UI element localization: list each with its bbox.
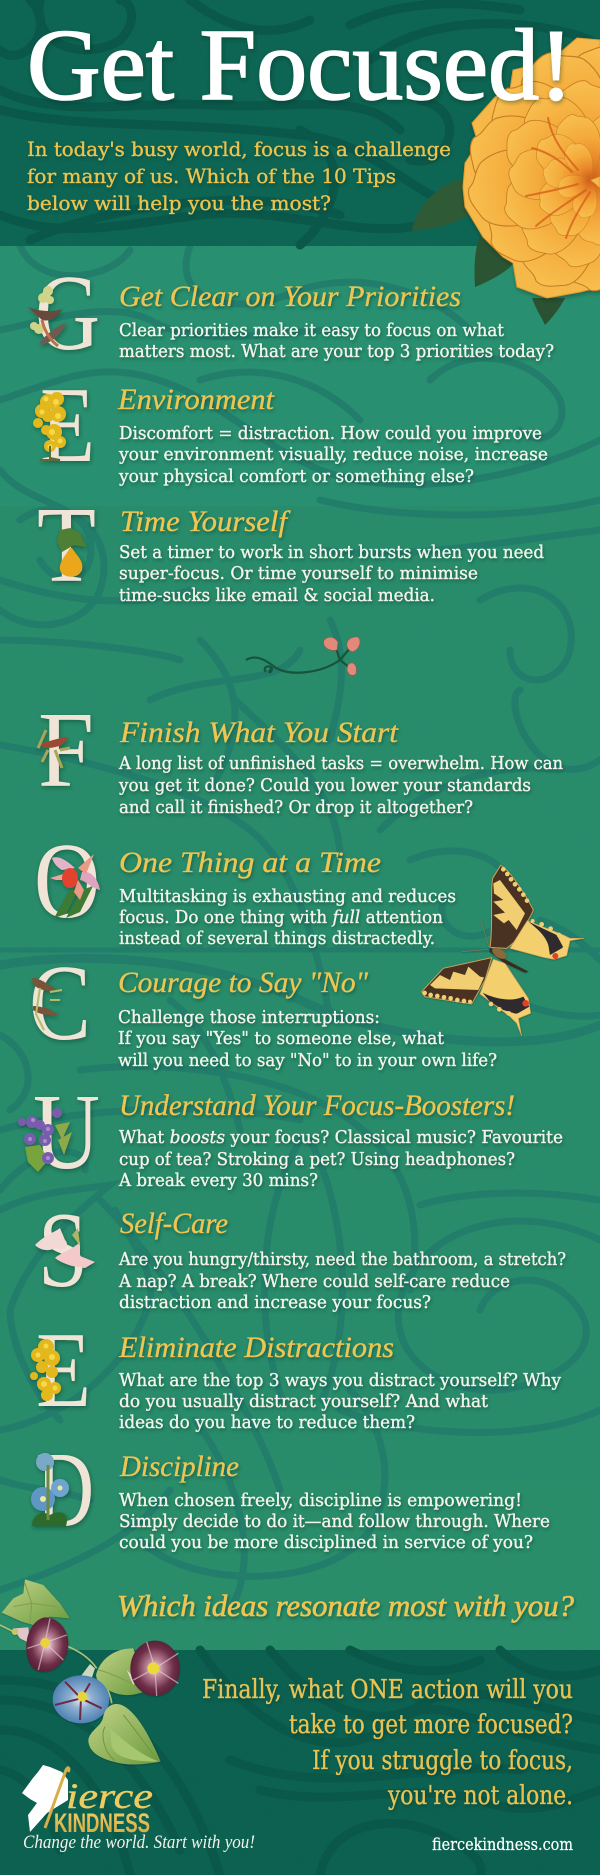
tip D: heading and text: could you be more disciplined in service of you? [119, 1532, 533, 1553]
divider: rosebud sprig [246, 637, 360, 675]
tip U: heading and text: A break every 30 mins? [118, 1170, 318, 1191]
tip C: heading and text: Challenge those interruptions: [118, 1007, 380, 1028]
tip S: heading and text: A nap? A break? Where could self-care reduce [118, 1271, 510, 1292]
illustration: morning glories and leaves [0, 1579, 180, 1764]
tip G: letter and bird illustration: G [35, 254, 100, 373]
closing text [202, 1675, 573, 1811]
tip C: heading and text: will you need to say "No" to in your own life? [118, 1050, 497, 1071]
intro text: for many of us. Which of the 10 Tips [27, 164, 396, 188]
closing text: Finally, what ONE action will you [202, 1675, 573, 1705]
tip E: heading and text [117, 383, 548, 487]
tip F: letter and bird: F [38, 691, 94, 810]
tip E: letter and yellow flowers: E [40, 366, 95, 485]
tip G: heading and text: matters most. What are your top 3 priorities today? [119, 341, 554, 362]
tip C: heading and text: Courage to Say "No" [118, 966, 368, 999]
tip E: heading and text: your environment visually, reduce noise, increase [118, 444, 548, 465]
tip O: heading and text: focus. Do one thing with full attention [119, 907, 443, 928]
logo: Fierce Kindness: ierce [66, 1776, 153, 1816]
logo: Fierce Kindness: KINDNESS [54, 1808, 150, 1838]
closing text: take to get more focused? [289, 1710, 573, 1740]
tip T: heading and text [119, 505, 544, 606]
tip T: heading and text: Set a timer to work in short bursts when you need [119, 542, 544, 563]
tip G: heading and text [119, 280, 554, 362]
tip G: heading and text: Get Clear on Your Priorities [119, 280, 461, 313]
leaves behind flower [412, 177, 565, 325]
tip E: heading and text: What are the top 3 ways you distract yourself? Why [119, 1370, 562, 1391]
tip F: heading and text: Finish What You Start [119, 716, 399, 749]
question heading: Which ideas resonate most with you? [117, 1588, 574, 1623]
tip C: letter and birds: C [29, 944, 91, 1063]
tip T: heading and text: time-sucks like email & social media. [119, 585, 435, 606]
tip U: heading and text: Understand Your Focus-Boosters! [119, 1089, 515, 1122]
tip S: letter and lilies: S [38, 1191, 88, 1310]
tip S: heading and text: Are you hungry/thirsty, need the bathroom, a stretch? [118, 1249, 566, 1270]
intro text: below will help you the most? [27, 191, 331, 215]
tip C: heading and text: If you say "Yes" to someone else, what [118, 1028, 445, 1049]
tip O: heading and text: instead of several things distractedly. [119, 928, 435, 949]
illustration: swallowtail butterfly [422, 865, 584, 1036]
tip E: heading and text: Environment [117, 383, 275, 416]
intro text [27, 137, 451, 215]
tip U: letter and violets: U [33, 1073, 100, 1192]
tip O: letter and orchid: O [34, 822, 100, 941]
tip S: heading and text: distraction and increase your focus? [119, 1292, 431, 1313]
tip E: heading and text: Eliminate Distractions [118, 1331, 394, 1364]
illustration: yellow peony flower [461, 38, 600, 299]
logo: Fierce Kindness [22, 1765, 255, 1853]
tip F: heading and text [118, 716, 563, 818]
tip D: heading and text: Simply decide to do it—and follow through. Where [119, 1511, 550, 1532]
tip D: heading and text: When chosen freely, discipline is empowering! [119, 1490, 522, 1511]
closing text: you're not alone. [387, 1781, 573, 1811]
tip C: heading and text [118, 966, 497, 1071]
tip E: heading and text: your physical comfort or something else? [118, 466, 474, 487]
tip T: heading and text: Time Yourself [120, 505, 291, 538]
tip D: letter and morning glories [31, 1431, 94, 1550]
icon: lion head [22, 1765, 68, 1832]
tip F: heading and text: A long list of unfinished tasks = overwhelm. How can [118, 753, 563, 774]
tip S: heading and text: Self-Care [120, 1207, 228, 1240]
tip F: heading and text: you get it done? Could you lower your standards [118, 775, 531, 796]
website url: fiercekindness.com [432, 1835, 573, 1855]
logo: Fierce Kindness: Change the world. Start with you! [23, 1832, 255, 1853]
tip E: heading and text: Discomfort = distraction. How could you improve [119, 423, 542, 444]
footer band [0, 1650, 600, 1875]
tip T: letter and pear: T [37, 486, 96, 605]
tip O: heading and text [119, 846, 456, 949]
tip D: heading and text [119, 1450, 550, 1553]
tip O: heading and text: Multitasking is exhausting and reduces [119, 886, 456, 907]
tip G: heading and text: Clear priorities make it easy to focus on what [119, 320, 504, 341]
tip D: letter and morning glories: D [36, 1431, 94, 1550]
tip O: heading and text: One Thing at a Time [119, 846, 381, 879]
background swirl pattern: body [0, 246, 600, 1610]
closing text: If you struggle to focus, [312, 1746, 573, 1776]
intro text: In today's busy world, focus is a challenge [27, 137, 451, 161]
tip E: heading and text [118, 1331, 562, 1433]
tip F: heading and text: and call it finished? Or drop it altogether? [119, 797, 473, 818]
tip U: heading and text: What boosts your focus? Classical music? Favourite [119, 1127, 563, 1148]
title: Get Focused! [27, 9, 573, 122]
tip U: heading and text [118, 1089, 563, 1191]
tip T: heading and text: super-focus. Or time yourself to minimise [119, 563, 478, 584]
tip E: letter and yellow flowers: E [36, 1311, 91, 1430]
tip E: heading and text: do you usually distract yourself? And what [119, 1391, 489, 1412]
tip E: heading and text: ideas do you have to reduce them? [119, 1412, 415, 1433]
header band [0, 0, 600, 246]
tip U: heading and text: cup of tea? Stroking a pet? Using headphones? [119, 1149, 515, 1170]
tip D: heading and text: Discipline [119, 1450, 239, 1483]
tip S: heading and text [118, 1207, 566, 1313]
